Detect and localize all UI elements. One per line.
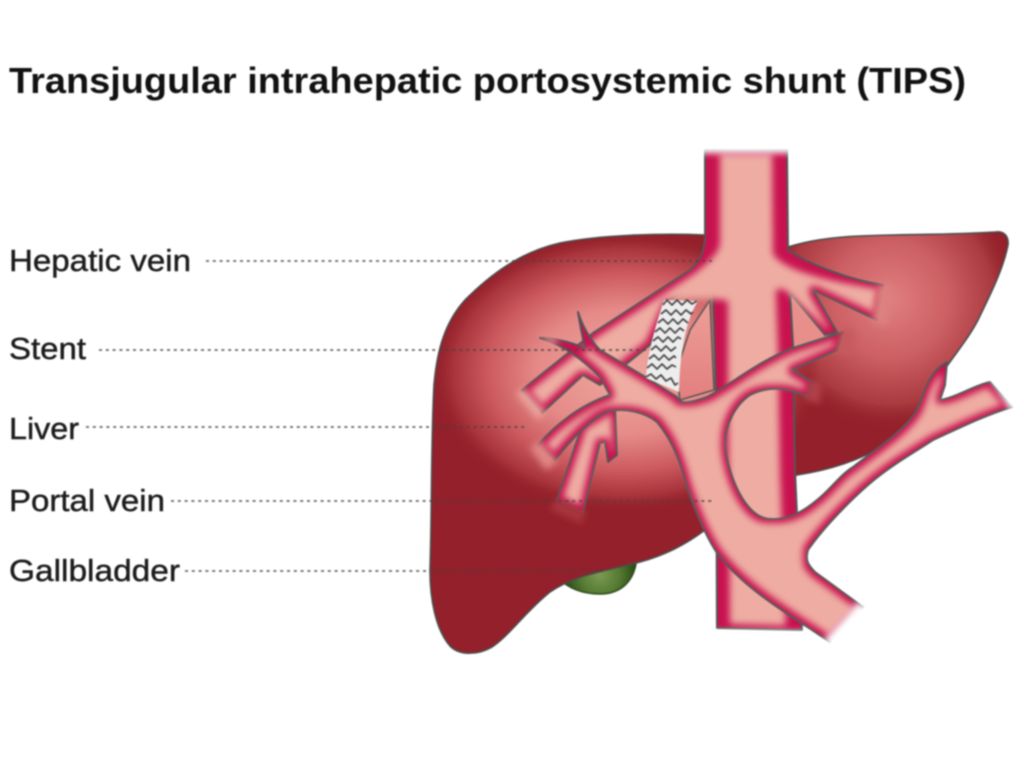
vena cava and hepatic veins bbox=[522, 150, 883, 630]
label: gallbladder: Gallbladder bbox=[9, 553, 180, 588]
liver bbox=[428, 230, 1010, 655]
title: Transjugular intrahepatic portosystemic shunt (TIPS) bbox=[9, 60, 966, 101]
label: hepatic vein: Hepatic vein bbox=[9, 243, 191, 278]
pale liver window right of vena cava bbox=[790, 293, 830, 350]
stent bbox=[646, 300, 698, 392]
label: portal vein: Portal vein bbox=[9, 483, 165, 518]
pale liver window beside the stent bbox=[676, 300, 714, 400]
gallbladder bbox=[558, 555, 637, 594]
label: liver: Liver bbox=[9, 411, 79, 446]
illustration: liver anatomy with TIPS stent bbox=[430, 141, 1024, 658]
lower left portal branch bbox=[557, 405, 617, 513]
label: stent: Stent bbox=[9, 331, 86, 366]
vessel end fades bbox=[516, 141, 1024, 658]
portal vein bbox=[538, 312, 1012, 642]
